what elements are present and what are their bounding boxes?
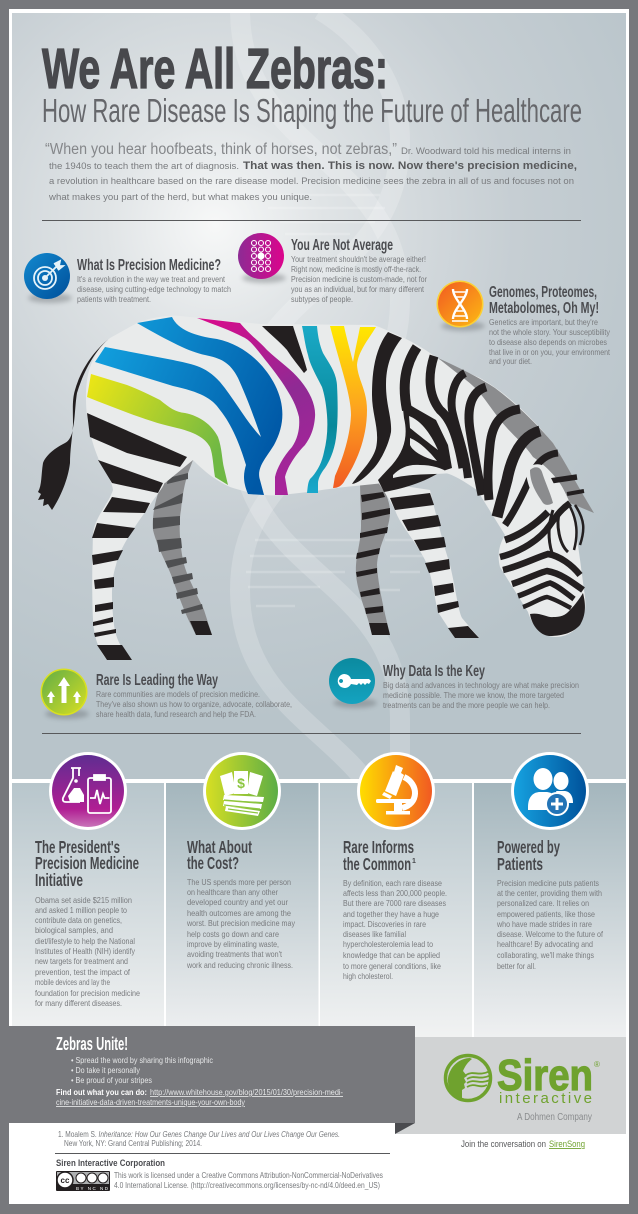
panel: The President's Precision Medicine Initiative: Initiative [35,870,83,890]
panel: Zebras Unite banner: http://www.whitehouse.gov/blog/2015/01/30/precision-medi- [150,1087,343,1097]
license text [114,1170,383,1190]
callout: You Are Not Average: You Are Not Average [291,237,393,254]
callout: Genomes, Proteomes, Metabolomes: to disease also depends on microbes [489,337,607,347]
callout: You Are Not Average: you as an individual, but for many different [291,284,425,294]
panel: Rare Informs the Common: hypercholesterolemia lead to [343,939,433,949]
callout: Genomes, Proteomes, Metabolomes: and your diet. [489,356,532,366]
panel: Powered by Patients: who have made strides in rare [496,919,592,929]
icon: target [24,253,72,303]
panel: Powered by Patients: disease. Welcome to the future of [497,929,603,939]
panel: Zebras Unite banner [9,1026,415,1134]
callout: You Are Not Average [238,233,427,304]
background DNA helix [240,10,425,880]
panel: The President's Precision Medicine Initiative: Institutes of Health (NIH) identify [35,946,136,956]
icon: creative commons badge: cc [61,1176,70,1185]
callout: Why Data Is the Key: treatments can be and the more people we can help. [383,700,550,710]
panel: Zebras Unite banner: Find out what you can do: [56,1087,147,1097]
panel: The President's Precision Medicine Initiative [12,783,164,1041]
callout: You Are Not Average: Precision medicine is custom-made, not for [291,274,427,284]
panel: The President's Precision Medicine Initiative: Obama set aside $215 million [35,895,132,905]
panel: What About the Cost: on healthcare than any other [187,887,278,897]
zebra blue stripes [95,317,282,495]
zebra ear [526,464,562,510]
zebra teal stripe [302,326,338,493]
panel: Rare Informs the Common: to more general conditions, like [343,961,441,971]
intro quote text: a revolution in healthcare based on the rare disease model. Precision medicine sees the zebra in all of us and focuses not on [49,176,574,187]
panel: Powered by Patients: collaborating, we'll make things [497,950,594,960]
panel: Zebras Unite banner: • Do take it personally [71,1065,141,1075]
zebra green stripe [87,374,228,485]
panel: Rare Informs the Common: But there are 7000 rare diseases [343,898,446,908]
panel: What About the Cost: worst. But precision medicine may [186,918,296,928]
panel: The President's Precision Medicine Initiative: and asked 1 million people to [35,905,127,915]
callout: Rare Is Leading the Way: Rare Is Leading the Way [96,672,218,689]
zebra chest white swirls [393,416,449,478]
zebra muzzle [530,593,585,636]
panel: What About the Cost: the Cost? [187,853,239,873]
panel: What About the Cost [166,783,318,1041]
panel: Zebras Unite banner: • Spread the word by sharing this infographic [71,1055,214,1065]
panel: The President's Precision Medicine Initiative: Precision Medicine [35,853,139,873]
zebra illustration [38,316,594,660]
zebra near front leg [378,482,479,638]
zebra magenta stripe [197,318,315,495]
callout: Rare Is Leading the Way: They've also shown us how to organize, advocate, collaborate, [96,699,292,709]
footnote [58,1129,340,1148]
callout: What Is Precision Medicine: patients with treatment. [77,294,151,304]
callout: Genomes, Proteomes, Metabolomes: not the whole story. Your susceptibility [489,327,611,337]
panel: Powered by Patients: Patients [497,854,543,874]
panel: Rare Informs the Common: Rare Informs [343,837,414,857]
zebra yellow orange stripe [330,326,376,488]
panel: Powered by Patients: at the center, providing them with [497,888,602,898]
icon: money: $ [237,775,245,791]
join the conversation line: SirenSong [549,1139,585,1149]
zebra body silhouette [86,316,593,637]
panel: The President's Precision Medicine Initiative: contribute data on genetics, [35,915,122,925]
zebra neck stripes [352,332,584,525]
icon: flask and clipboard [49,752,127,830]
callout: What Is Precision Medicine: disease, using cutting-edge technology to match [77,284,231,294]
panel: Powered by Patients: Precision medicine puts patients [497,878,599,888]
panel: Powered by Patients [474,783,626,1041]
panel: Rare Informs the Common [320,783,472,1041]
panel: Rare Informs the Common: By definition, each rare disease [343,878,442,888]
panel: The President's Precision Medicine Initiative: mobile devices and lay the [35,977,110,987]
zebra far front leg [356,477,390,635]
callout: You Are Not Average: subtypes of people. [291,294,353,304]
panel: Rare Informs the Common: impact. Discoveries in rare [343,919,426,929]
panel: Siren logo: Siren [497,1051,593,1100]
icon: DNA [436,280,485,331]
zebra black wedge [262,326,307,373]
panel: Powered by Patients: better for all. [497,961,536,971]
panel: What About the Cost: What About [187,837,252,857]
panel: What About the Cost: health outcomes are among the [187,908,291,918]
panel: Powered by Patients: personalized care. It relies on [497,898,589,908]
panel: Rare Informs the Common: the Common [343,854,411,874]
callout: Rare Is Leading the Way [40,668,292,719]
panel: The President's Precision Medicine Initiative: prevention, test the impact of [35,967,131,977]
callout: Why Data Is the Key: Big data and advances in technology are what make precision [383,680,579,690]
icon: people with plus [511,752,589,830]
intro quote text: “When you hear hoofbeats, think of horses, not zebras,” [45,141,397,158]
panel: Siren logo [395,1037,626,1134]
panel: Rare Informs the Common: diseases like familial [343,929,406,939]
intro quote text [45,141,577,203]
panel: Zebras Unite banner: cine-initiative-data-driven-treatments-unique-your-own-body [56,1097,246,1107]
panel: Siren logo: interactive [499,1090,592,1107]
panel: Zebras Unite banner: • Be proud of your stripes [71,1075,152,1085]
callout: Genomes, Proteomes, Metabolomes: that live in or on you, your environment [489,347,610,357]
zebra near rear leg [92,458,165,660]
callout: What Is Precision Medicine [24,253,231,304]
logo emblem [446,1056,491,1100]
zebra head stripes [500,503,583,608]
panel: Powered by Patients: Powered by [497,837,560,857]
intro quote text: the 1940s to teach them the art of diagnosis. [49,161,239,172]
zebra tail [38,338,110,510]
panel: What About the Cost: avoiding treatments that won't [187,949,283,959]
panel: Rare Informs the Common: high cholesterol. [343,971,393,981]
panel: Siren logo: A Dohmen Company [517,1112,592,1123]
title [42,37,582,130]
title: We Are All Zebras: [42,37,388,101]
zebra mane [438,358,594,513]
panel: The President's Precision Medicine Initiative: The President's [35,837,120,857]
panel: The President's Precision Medicine Initiative: for many different diseases. [35,998,122,1008]
join the conversation line: Join the conversation on [461,1139,546,1149]
intro quote text: Dr. Woodward told his medical interns in [401,146,571,157]
zebra far rear leg [153,460,212,635]
callout: Rare Is Leading the Way: share health data, fund research and help the FDA. [96,709,256,719]
icon: money [203,752,281,830]
panel: Rare Informs the Common: and together they have a huge [343,909,439,919]
callout: Genomes, Proteomes, Metabolomes: Genetics are important, but they're [489,317,598,327]
panel: Rare Informs the Common: affects less than 200,000 people. [343,888,447,898]
panel: Powered by Patients: empowered patients, like those [497,909,595,919]
callout: Why Data Is the Key [329,658,579,710]
panel: main background [12,13,626,779]
license text: This work is licensed under a Creative Commons Attribution-NonCommercial-NoDerivatives [114,1170,383,1180]
zebra rump black stripe [87,413,187,467]
callout: What Is Precision Medicine: What Is Precision Medicine? [77,257,221,274]
callout: Genomes, Proteomes, Metabolomes [436,280,611,366]
footnote: New York, NY: Grand Central Publishing; 2014. [64,1138,202,1148]
icon: up arrows [40,668,89,719]
intro quote text: what makes you part of the herd, but what makes you unique. [48,192,312,203]
company name: Siren Interactive Corporation [56,1158,165,1168]
icon: dot grid [238,233,286,283]
intro quote text: That was then. This is now. Now there's precision medicine, [243,160,577,172]
panel: What About the Cost: developed country and yet our [187,897,288,907]
panel: The President's Precision Medicine Initiative: foundation for precision medicine [35,988,140,998]
panel: Rare Informs the Common: knowledge that can be applied [343,950,440,960]
callout: Why Data Is the Key: medicine possible. The more we know, the more targeted [383,690,564,700]
panel: The President's Precision Medicine Initiative: diet/lifestyle to help the National [35,936,135,946]
panel: Siren logo: ® [594,1060,600,1069]
icon: key [329,658,377,708]
footnote: 1. Moalem S. Inheritance: How Our Genes Change Our Lives and Our Lives Change Our Genes. [58,1129,340,1139]
callout: What Is Precision Medicine: It's a revolution in the way we treat and prevent [77,274,225,284]
panel: Powered by Patients: healthcare! By advocating and [497,939,593,949]
panel: What About the Cost: The US spends more per person [187,877,291,887]
panel: Zebras Unite banner: Zebras Unite! [56,1034,128,1054]
callout: Why Data Is the Key: Why Data Is the Key [383,663,485,680]
panel: Rare Informs the Common: 1 [412,858,416,865]
callout: Rare Is Leading the Way: Rare communities are models of precision medicine. [96,689,260,699]
callout: You Are Not Average: Your treatment shouldn't be average either! [291,254,426,264]
license text: 4.0 International License. (http://creativecommons.org/licenses/by-nc-nd/4.0/deed.en_US) [114,1180,380,1190]
panel: The President's Precision Medicine Initiative: biological samples, and [35,925,113,935]
icon: creative commons badge: BY NC ND [76,1186,109,1191]
icon: microscope [357,752,435,830]
panel: What About the Cost: improve by eliminating waste, [187,939,279,949]
panel: What About the Cost: help costs go down and care [187,929,279,939]
icon: creative commons badge [56,1171,110,1191]
panel: The President's Precision Medicine Initiative: new targets for treatment and [35,956,128,966]
callout: You Are Not Average: Right now, medicine is mostly off-the-rack. [291,264,421,274]
panel: What About the Cost: work and reducing chronic illness. [186,960,293,970]
